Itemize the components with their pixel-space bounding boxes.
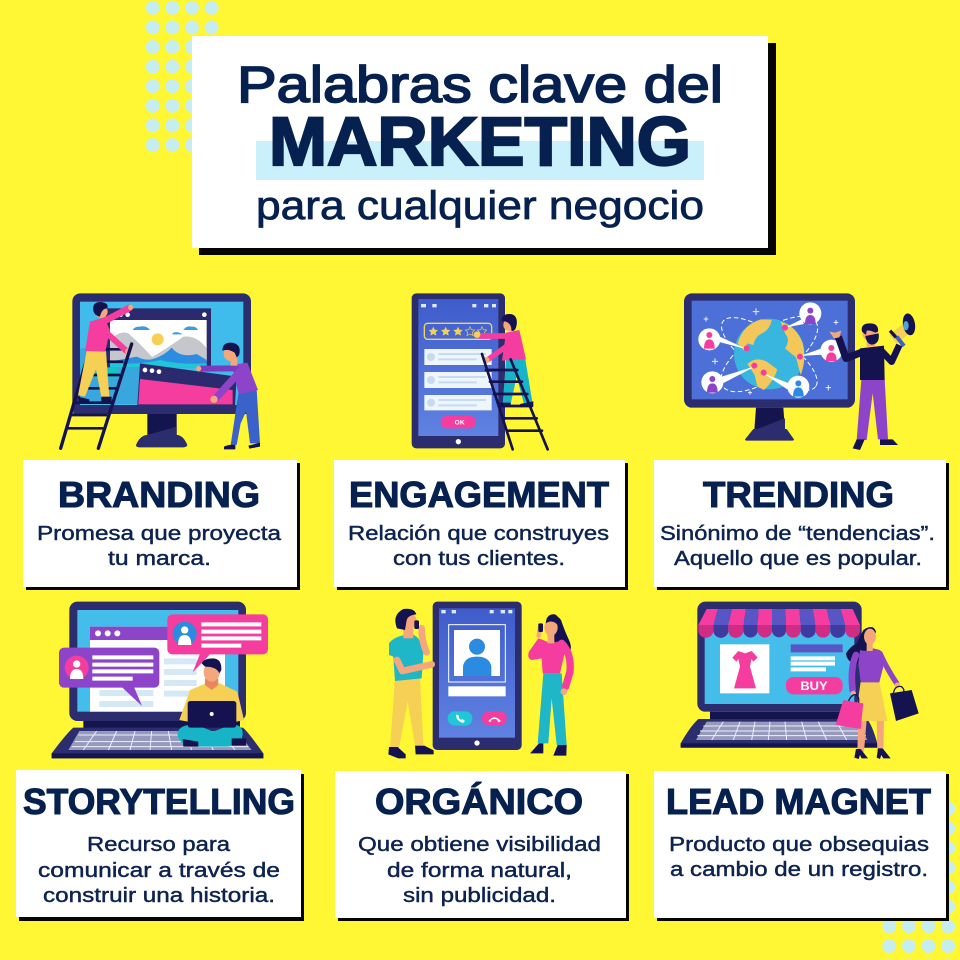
icon: dress [732,651,758,688]
title: MARKETING: MARKETING [269,103,691,180]
illustration: organic phone with two people [388,602,571,758]
heading: ORGÁNICO [375,781,583,822]
person with laptop [177,658,246,747]
heading: TRENDING [703,474,894,515]
buy button: BUY [800,679,828,693]
description: de forma natural, [387,860,572,882]
title: line 1: Palabras clave del [237,56,723,113]
description: comunicar a través de [38,860,280,882]
illustration: engagement phone with ratings [412,293,548,449]
woman with bags [836,627,919,759]
illustration: branding monitor with two people [61,293,260,449]
globe [734,319,805,390]
title: line 3: para cualquier negocio [256,184,704,228]
description: Promesa que proyecta [37,523,282,545]
ladder back rail [61,348,90,448]
illustration: lead magnet laptop shop with woman [681,602,919,759]
description: Relación que construyes [348,523,609,545]
illustration: trending monitor globe with man and megaphone [684,293,917,450]
ladder [482,354,548,449]
card: organico [335,771,629,921]
description [358,834,601,907]
person right [196,343,260,449]
person on ladder [77,302,133,402]
description: con tus clientes. [393,548,565,570]
card: engagement [334,460,628,590]
card: branding [23,460,300,590]
description: a cambio de un registro. [670,859,928,881]
title panel [192,36,776,255]
heading: BRANDING [58,474,260,515]
description: construir una historia. [43,885,275,907]
description: Aquello que es popular. [674,548,922,570]
bubble: purple [59,648,159,706]
black bag [890,686,919,721]
illustration: storytelling laptop with chat bubbles [52,602,268,758]
call buttons [448,711,507,726]
man [388,609,434,758]
description: tu marca. [108,548,211,570]
avatars [698,302,842,398]
dot pattern: bottom right [880,799,960,960]
card: trending [654,460,949,590]
buy button [786,677,843,694]
description: Sinónimo de “tendencias”. [660,523,935,545]
card: storytelling [16,770,304,921]
pink bag [836,695,863,729]
description [669,834,929,881]
man with megaphone [829,312,917,450]
stars [429,327,487,336]
card: lead magnet [654,771,949,921]
heading: LEAD MAGNET [666,781,931,822]
description: Que obtiene visibilidad [358,834,601,856]
dot pattern: top left [143,0,221,155]
description: sin publicidad. [403,885,556,907]
person on ladder [474,314,533,407]
description [660,523,935,570]
description: Recurso para [87,834,231,856]
heading: ENGAGEMENT [349,474,609,515]
description [38,834,280,907]
awning [698,609,860,638]
description [348,523,609,570]
heading: STORYTELLING [23,781,295,822]
bubble: pink [167,614,268,672]
description [37,523,282,570]
woman [528,614,571,756]
illustration: engagement phone with ratings: OK [455,420,465,427]
description: Producto que obsequias [669,834,929,856]
megaphone [889,312,917,346]
